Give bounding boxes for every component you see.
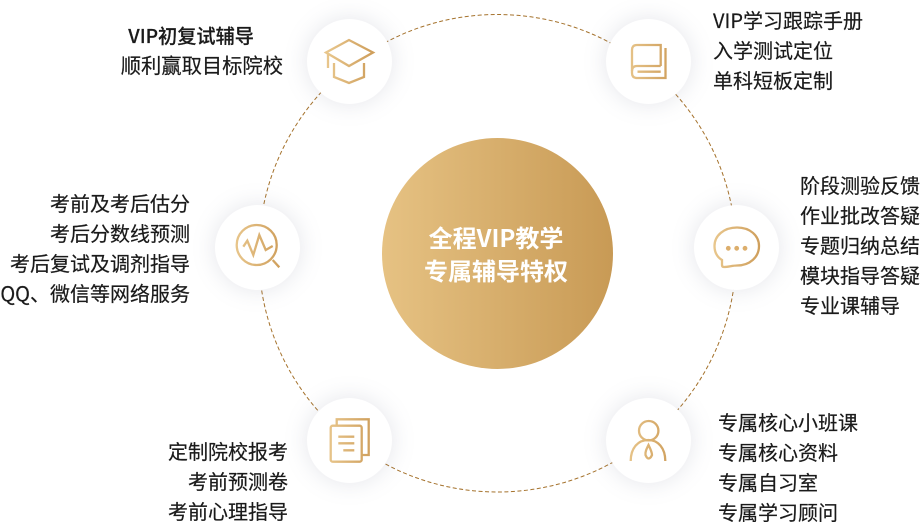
text: left bbox=[0, 188, 190, 307]
icon: speech bubble bbox=[694, 205, 779, 290]
text: right: 作业批改答疑 bbox=[800, 200, 920, 229]
text: top right: 单科短板定制 bbox=[713, 65, 833, 94]
text: bottom right: 专属核心小班课 bbox=[718, 407, 858, 436]
icon: magnifier chart bbox=[215, 205, 300, 290]
text: top left: VIP初复试辅导 bbox=[128, 20, 254, 48]
text: left: 考前及考后估分 bbox=[50, 188, 190, 217]
text: right bbox=[800, 170, 920, 319]
text: bottom left: 考前预测卷 bbox=[188, 466, 288, 495]
center circle: 全程VIP教学 bbox=[429, 219, 563, 254]
text: bottom right: 专属自习室 bbox=[718, 467, 818, 496]
text: top right bbox=[712, 5, 863, 94]
text: left: 考后复试及调剂指导 bbox=[10, 248, 190, 277]
text: right: 模块指导答疑 bbox=[800, 260, 920, 289]
icon: book bbox=[606, 19, 691, 104]
text: top left: 顺利赢取目标院校 bbox=[121, 48, 283, 78]
text: bottom right: 专属核心资料 bbox=[718, 437, 838, 466]
text: top right: 入学测试定位 bbox=[713, 35, 833, 64]
icon: person with tie bbox=[606, 398, 691, 483]
text: bottom left bbox=[168, 436, 288, 522]
center circle: 专属辅导特权 bbox=[424, 252, 568, 287]
text: top left bbox=[121, 20, 283, 78]
text: right: 专业课辅导 bbox=[800, 290, 900, 319]
text: left: QQ、微信等网络服务 bbox=[0, 278, 190, 307]
text: right: 阶段测验反馈 bbox=[800, 170, 920, 199]
text: bottom left: 定制院校报考 bbox=[168, 436, 288, 465]
center circle bbox=[382, 138, 613, 369]
icon: graduation cap bbox=[307, 19, 392, 104]
text: left: 考后分数线预测 bbox=[50, 218, 190, 247]
text: right: 专题归纳总结 bbox=[800, 230, 920, 259]
text: top right: VIP学习跟踪手册 bbox=[713, 5, 863, 34]
icon: documents bbox=[307, 398, 392, 483]
text: bottom right bbox=[718, 407, 858, 522]
